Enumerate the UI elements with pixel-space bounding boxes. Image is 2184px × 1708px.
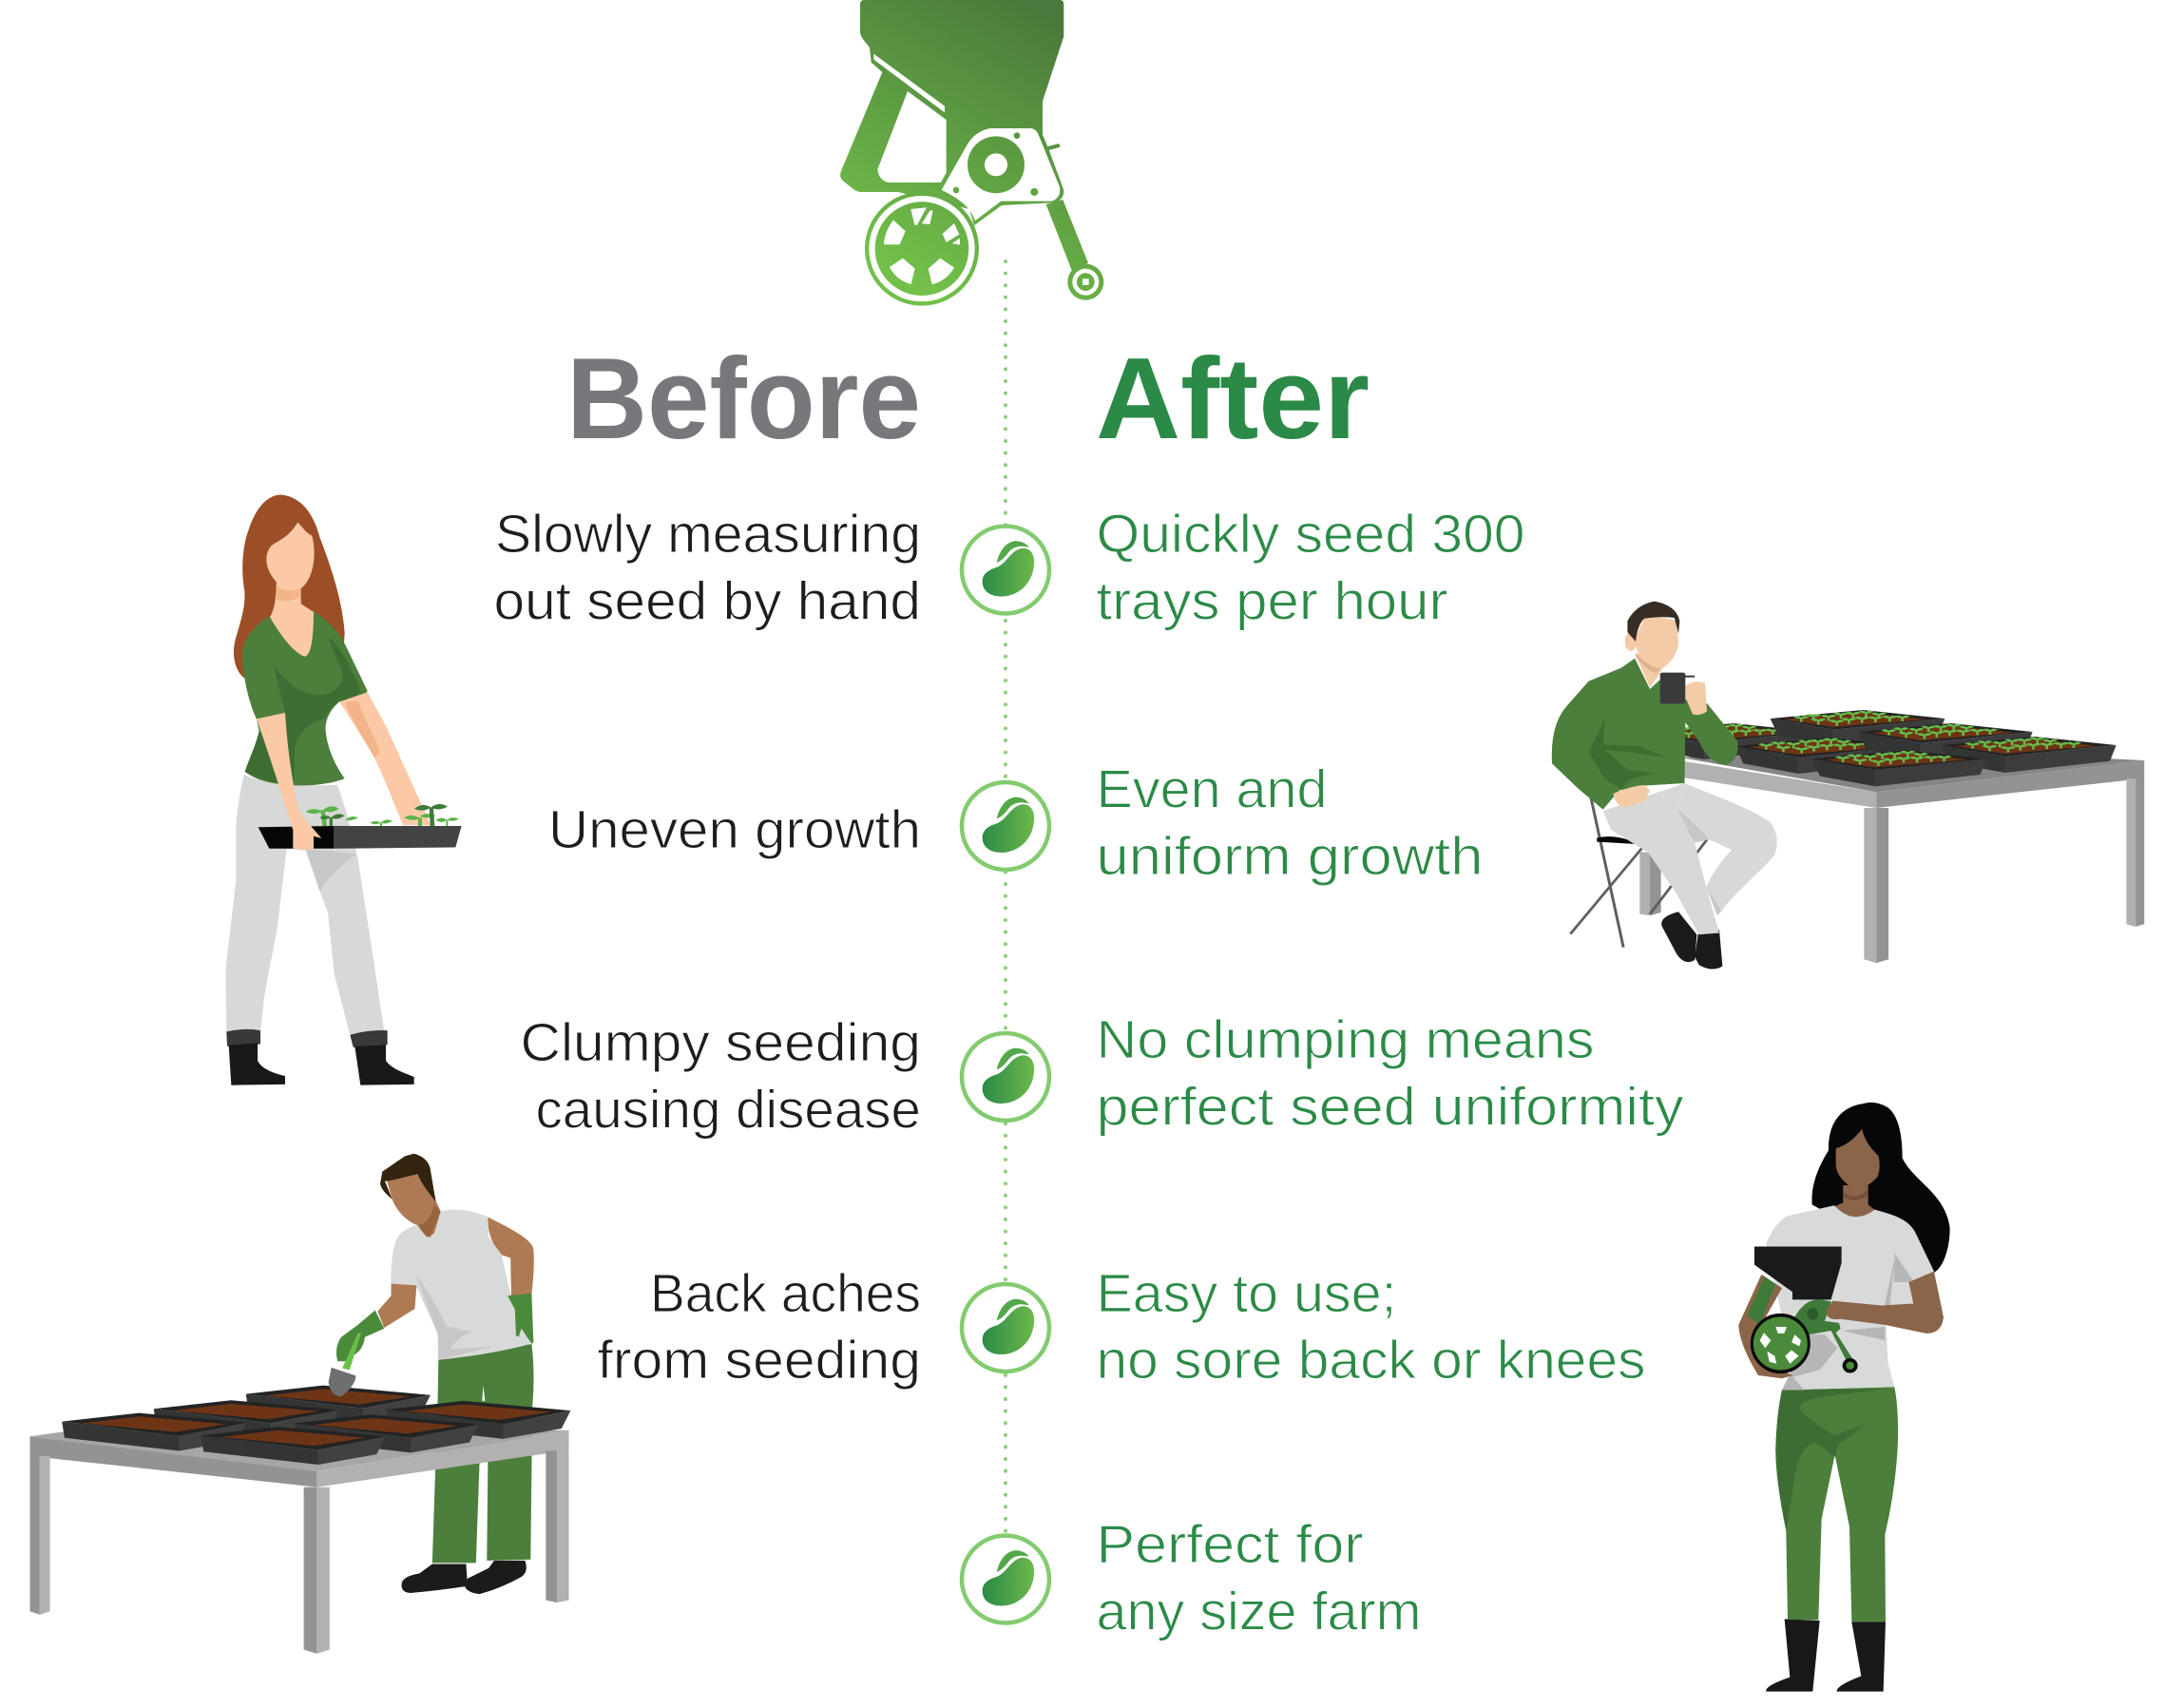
after text: no clumping: No clumping means (1097, 1009, 1595, 1070)
after text: even growth: Even and (1097, 758, 1327, 819)
icon: trowel (329, 1333, 361, 1396)
illustration: woman holding seeder (1738, 1103, 1950, 1692)
folding chair (1570, 796, 1708, 948)
before text: clumpy seeding (521, 1012, 921, 1141)
before text: measuring by hand: out seed by hand (494, 571, 921, 632)
before text: back aches: Back aches (650, 1263, 921, 1324)
heading: After: After (1096, 334, 1370, 463)
illustration: woman carrying tray (225, 494, 462, 1085)
after text: no clumping: perfect seed uniformity (1097, 1077, 1684, 1138)
before text: measuring by hand (494, 504, 921, 632)
after text: quickly seed (1097, 504, 1524, 632)
table with seedling trays (1639, 710, 2144, 963)
after text: even growth: uniform growth (1097, 826, 1483, 887)
work table (29, 1430, 568, 1654)
icon: seed 5 (962, 1536, 1049, 1623)
icon: seed 1 (962, 527, 1049, 614)
soil trays (62, 1386, 570, 1465)
before text: clumpy seeding: causing disease (536, 1080, 921, 1141)
man body (336, 1154, 534, 1594)
after text: any size farm (1097, 1514, 1422, 1642)
before text: uneven growth: Uneven growth (548, 799, 921, 860)
seated man (1552, 602, 1777, 969)
heading: Before: Before (566, 334, 921, 463)
icon: seed 4 (962, 1284, 1049, 1372)
after text: easy to use (1097, 1263, 1646, 1391)
dotted center line (1004, 261, 1007, 1532)
after text: even growth (1097, 758, 1483, 887)
before text: back aches: from seeding (597, 1330, 921, 1391)
before text: back aches (597, 1263, 921, 1391)
after text: any size farm: Perfect for (1097, 1514, 1364, 1575)
after text: any size farm: any size farm (1097, 1582, 1422, 1642)
illustration: man seeding trays at table (29, 1154, 570, 1654)
icon: seeder machine (840, 0, 1103, 306)
illustration: man drinking coffee at seeded trays (1552, 602, 2144, 969)
after text: no clumping (1097, 1009, 1684, 1138)
icon: seed 3 (962, 1033, 1049, 1121)
after text: easy to use: no sore back or knees (1097, 1330, 1646, 1391)
after text: easy to use: Easy to use; (1097, 1263, 1397, 1324)
icon: seed 2 (962, 782, 1049, 870)
after text: quickly seed: trays per hour (1097, 571, 1448, 632)
before text: clumpy seeding: Clumpy seeding (521, 1012, 921, 1073)
after text: quickly seed: Quickly seed 300 (1097, 504, 1524, 565)
before text: measuring by hand: Slowly measuring (495, 504, 921, 565)
